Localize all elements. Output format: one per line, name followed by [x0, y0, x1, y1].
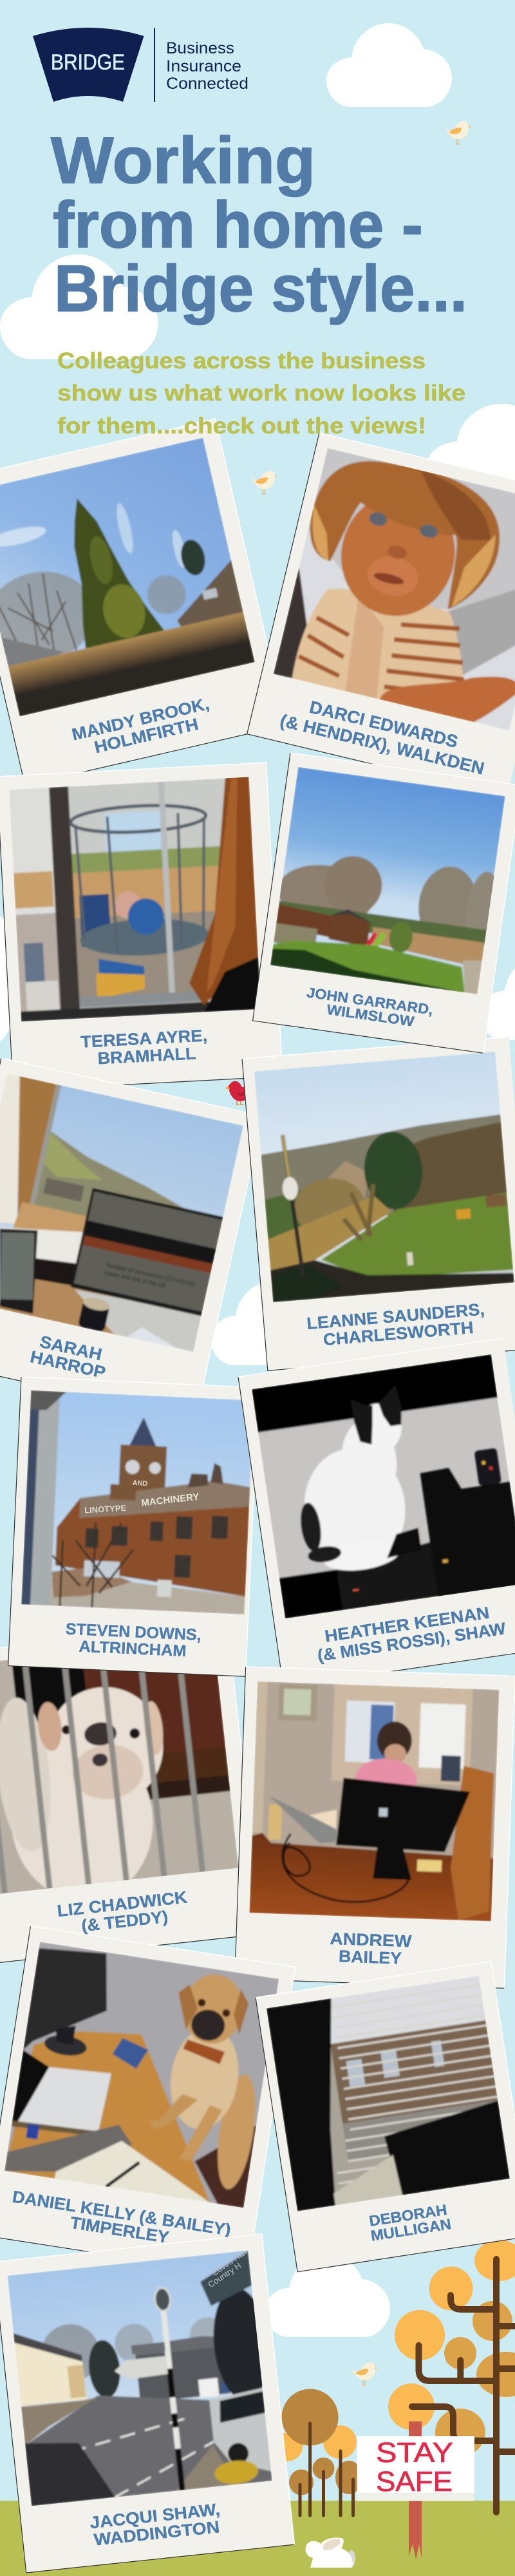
caption: DEBORAH — [368, 2201, 448, 2230]
sign: stay safe: SAFE — [376, 2466, 453, 2497]
caption — [89, 2499, 223, 2550]
caption: WADDINGTON — [93, 2517, 220, 2550]
caption — [80, 1025, 209, 1069]
caption: ANDREW — [330, 1929, 412, 1951]
cloud: right sliver — [480, 956, 515, 1040]
cloud: behind title — [0, 254, 158, 359]
caption: JACQUI SHAW, — [89, 2499, 221, 2532]
caption: CHARLESWORTH — [323, 1318, 474, 1349]
photo: Linotype clock tower building: LINOTYPE — [84, 1503, 127, 1515]
logo: Bridge Insurance: Connected — [166, 75, 248, 93]
polaroid: Steven Downs — [8, 1377, 259, 1676]
caption — [64, 1620, 201, 1661]
icon: rabbit — [305, 2536, 355, 2568]
cloud: right of intro — [427, 404, 515, 496]
polaroid: John Garrard — [253, 753, 515, 1053]
ground — [0, 2501, 515, 2576]
title: from home - — [53, 188, 423, 261]
icon: red bird — [225, 1081, 250, 1104]
caption: HEATHER KEENAN — [323, 1603, 491, 1646]
caption: STEVEN DOWNS, — [65, 1620, 201, 1644]
icon: bird mid — [252, 471, 277, 494]
icon: bird top right — [445, 121, 471, 144]
photo: black and white cat — [252, 1354, 515, 1618]
photo: laptop at a window — [0, 1074, 243, 1352]
polaroid: Liz Chadwick — [0, 1646, 242, 1963]
photo: garden view over valley — [254, 1052, 514, 1302]
caption: (& HENDRIX), WALKDEN — [278, 711, 486, 779]
caption: MANDY BROOK, — [70, 694, 211, 744]
photo: dog at desk — [5, 1942, 279, 2208]
photo: laptop at a window: Number of coronavirus (COVID-19) — [106, 1262, 196, 1287]
cloud: left sliver — [0, 914, 19, 1043]
photo: village road junction — [7, 2246, 283, 2506]
caption: TERESA AYRE, — [80, 1025, 208, 1052]
sign: stay safe — [357, 2421, 474, 2559]
caption: HOLMFIRTH — [92, 714, 200, 757]
photo: window with blinds — [267, 1976, 510, 2211]
logo: Bridge Insurance — [33, 28, 248, 102]
polaroid: Leanne Saunders — [242, 1037, 515, 1370]
photo: bulldog behind gate — [0, 1660, 238, 1894]
photo: garden and shed — [267, 766, 515, 996]
title: Bridge style... — [54, 252, 467, 325]
caption: LIZ CHADWICK — [56, 1887, 188, 1920]
caption: DANIEL KELLY (& BAILEY) — [11, 2187, 232, 2240]
caption — [368, 2201, 453, 2244]
caption: TIMPERLEY — [69, 2213, 171, 2247]
caption — [28, 1331, 111, 1382]
photo: village road junction: Eaves Hall — [210, 2247, 248, 2277]
intro text — [57, 348, 465, 439]
photo: trampoline through patio door — [9, 772, 261, 1022]
intro text: for them....check out the views! — [57, 413, 426, 439]
photo: Linotype clock tower building: MACHINERY — [141, 1492, 200, 1509]
caption: ALTRINCHAM — [79, 1638, 187, 1660]
photo: hi-fi and remote — [351, 1447, 515, 1596]
caption: (& TEDDY) — [80, 1907, 169, 1935]
caption — [329, 1929, 412, 1968]
caption — [314, 1601, 507, 1665]
polaroid: Daniel Kelly — [0, 1926, 295, 2277]
cloud: top right — [326, 23, 452, 107]
polaroid: Heather Keenan — [238, 1338, 515, 1687]
caption: SARAH — [38, 1332, 104, 1364]
photo: Linotype clock tower building — [21, 1390, 254, 1615]
intro text: show us what work now looks like — [57, 381, 465, 406]
logo: Bridge Insurance: Business — [166, 39, 234, 57]
polaroid: Andrew Bailey — [235, 1667, 515, 1988]
caption: (& MISS ROSSI), SHAW — [316, 1618, 507, 1665]
photo: laptop at a window: cases and risk in the UK — [104, 1269, 167, 1289]
polaroid: Deborah Mulligan — [256, 1962, 515, 2272]
cloud: lower — [265, 2253, 390, 2337]
intro text: Colleagues across the business — [57, 348, 426, 374]
polaroid: Mandy Brook — [0, 419, 286, 786]
cloud: mid page — [211, 1282, 336, 1365]
caption: HARROP — [28, 1347, 108, 1382]
polaroid: Jacqui Shaw — [0, 2234, 294, 2573]
illustration: trees — [270, 2240, 515, 2515]
caption — [306, 1299, 487, 1350]
polaroid: Darci Edwards — [247, 433, 515, 797]
caption: MULLIGAN — [370, 2215, 453, 2244]
title: Working — [51, 124, 315, 197]
photo: Linotype clock tower building: AND — [132, 1479, 148, 1488]
caption: JOHN GARRARD, — [306, 984, 434, 1018]
caption — [304, 984, 434, 1032]
photo: home office — [249, 1681, 500, 1922]
caption: LEANNE SAUNDERS, — [306, 1299, 485, 1333]
caption: BRAMHALL — [97, 1043, 196, 1068]
caption: BAILEY — [338, 1946, 402, 1968]
photo: village road junction: Country H — [206, 2260, 243, 2289]
logo: Bridge Insurance: Insurance — [166, 57, 241, 75]
polaroid: Teresa Ayre — [0, 762, 283, 1090]
polaroid: Sarah Harrop — [0, 1057, 251, 1385]
sign: stay safe: STAY — [376, 2437, 453, 2468]
caption: WILMSLOW — [326, 1001, 415, 1030]
title — [51, 124, 467, 325]
photo: conifer and hedge — [0, 437, 255, 719]
caption: DARCI EDWARDS — [308, 697, 460, 752]
logo: Bridge Insurance: BRIDGE — [51, 50, 125, 75]
icon: bird lower — [352, 2362, 377, 2385]
caption — [56, 1887, 190, 1938]
photo: child — [274, 446, 515, 731]
caption — [70, 694, 215, 761]
